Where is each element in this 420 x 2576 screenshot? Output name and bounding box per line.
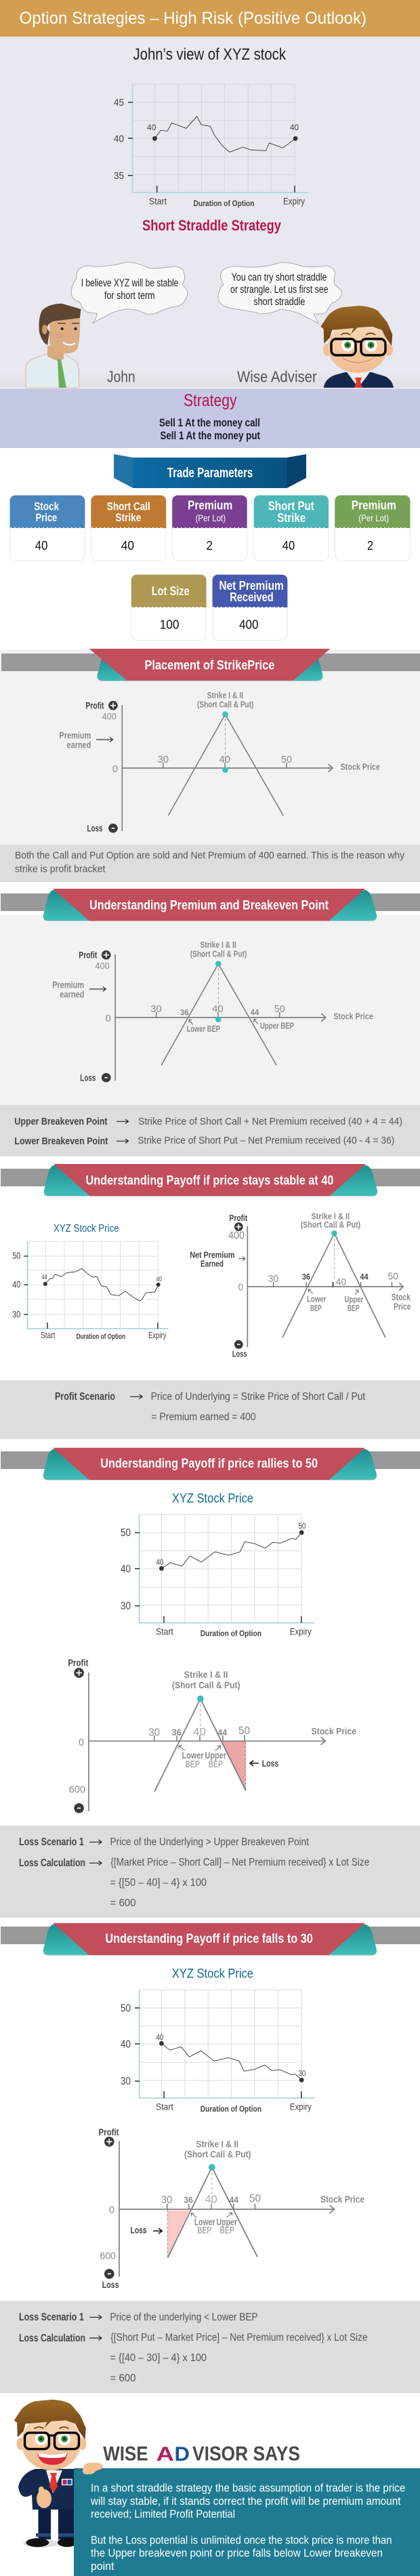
panel: Strategy: Sell 1 At the money put [160,429,260,442]
chart: XYZ stock price fall: Duration of Option [201,2104,261,2114]
chart: XYZ stock price fall: 30 [298,2070,306,2078]
chart: payoff when price rallies to 50: 44 [218,1727,228,1737]
text band: breakeven formulas: Lower Breakeven Point [14,1135,108,1147]
chart: strike placement payoff: Strike I & II [207,691,243,700]
chart: XYZ stock price stable: Expiry [148,1330,167,1340]
chart: payoff when price falls to 30: 36 [184,2194,193,2205]
card: Short Call Strike [91,496,166,561]
chart: payoff when price falls to 30: BEP [220,2226,234,2236]
chart: John's view line chart: Start [149,196,167,207]
card: Stock Price: Stock [34,500,59,512]
chart: John's view line chart: 40 [290,123,299,132]
ribbon heading: Understanding Payoff if price rallies to 50 [1,1448,420,1481]
header banner: Option Strategies – High Risk (Positive Outlook) [19,9,366,28]
chart: payoff when price rallies to 50: Profit [68,1657,89,1668]
chart: payoff when price rallies to 50: BEP [186,1759,200,1769]
chart: premium and breakeven payoff: Stock Price [333,1011,373,1022]
icon: mascot hand on panel [83,2463,103,2474]
chart: strike placement payoff [59,691,380,834]
chart: XYZ stock price rally: 30 [121,1601,131,1612]
chart: John's view line chart: 35 [114,170,124,182]
chart: XYZ stock price rally: 50 [298,1523,306,1531]
text band: loss scenario at 50: Price of the Underlying > Upper Breakeven Point [110,1836,310,1848]
chart: payoff when price falls to 30: BEP [197,2226,211,2236]
chart: payoff at stable price: 36 [302,1272,310,1281]
text band: breakeven formulas: Strike Price of Short Put – Net Premium received (40 - 4 = 36) [138,1135,394,1146]
text band: loss scenario at 30: {[Short Put – Market Price] – Net Premium received} x Lot Size [110,2332,368,2343]
character: Wise Adviser [320,306,394,388]
heading: Wise Advisor Says: VISOR SAYS [192,2442,300,2465]
chart: payoff at stable price: Strike I & II [312,1211,350,1221]
chart: payoff when price falls to 30: 30 [161,2194,173,2206]
card: Premium (Per Lot) call: 2 [206,539,213,552]
heading: Wise Advisor Says: D [175,2443,190,2466]
text band: breakeven formulas: Strike Price of Short Call + Net Premium received (40 + 4 = 44) [138,1116,402,1127]
panel: John's view and conversation [0,37,420,388]
text band: loss scenario at 50: = {[50 – 40] – 4} x 100 [110,1877,207,1889]
heading: Wise Advisor Says: WISE [103,2442,148,2465]
card: Stock Price [10,496,85,561]
card: Premium (Per Lot) put: 2 [367,539,373,552]
ribbon heading: Understanding Payoff if price falls to 30: Understanding Payoff if price falls to 30 [105,1932,313,1946]
chart: premium and breakeven payoff: (Short Call & Put) [190,949,247,959]
note: strike placement explanation: strike is profit bracket [15,864,106,875]
chart: payoff when price rallies to 50: 30 [148,1727,160,1739]
chart: payoff when price rallies to 50: 50 [238,1725,250,1737]
text band: breakeven formulas [0,1105,420,1156]
chart: payoff when price falls to 30: Loss [130,2226,147,2236]
chart: premium and breakeven payoff: 40 [212,1003,224,1015]
chart: XYZ stock price rally: 40 [156,1559,163,1567]
card: Net Premium Received: Net Premium [219,579,284,592]
chart: payoff when price falls to 30: 600 [100,2251,116,2262]
text band: profit scenario: = Premium earned = 400 [151,1411,256,1423]
character: Wise Advisor mascot [14,2400,87,2548]
chart: XYZ stock price stable: Start [41,1330,56,1340]
chart: strike placement payoff: 30 [157,754,169,765]
card: Stock Price: 40 [35,539,47,552]
chart: payoff at stable price: Earned [201,1259,224,1269]
card: Net Premium Received: Received [230,590,274,604]
ribbon heading: Trade Parameters [114,454,306,488]
chart: payoff at stable price: Net Premium [190,1250,234,1260]
text band: profit scenario [0,1380,420,1439]
chart: payoff when price falls to 30: Strike I & II [196,2138,238,2149]
card: Stock Price: Price [36,511,57,524]
chart: XYZ stock price stable: Duration of Option [77,1333,125,1341]
chart: John's view line chart: 45 [114,97,124,108]
speech bubble: John: for short term [104,290,155,302]
chart: premium and breakeven payoff: 44 [251,1007,259,1017]
chart: payoff when price falls to 30: Lower [194,2217,215,2228]
chart: payoff at stable price [190,1211,411,1359]
card: Premium (Per Lot) call: Premium [188,499,232,512]
card: Net Premium Received [213,575,287,640]
text band: loss scenario at 30: = {[40 – 30] – 4} x 100 [110,2352,207,2364]
chart: payoff when price falls to 30: Loss [102,2280,119,2290]
note: strike placement explanation [0,845,420,882]
card: Lot Size: 100 [160,618,179,632]
card: Lot Size: Lot Size [152,584,190,598]
text band: loss scenario at 30: Price of the underlying < Lower BEP [110,2312,257,2323]
card: Premium (Per Lot) put: Premium [352,499,396,512]
name label: John: John [107,367,135,385]
heading: John's view of XYZ stock: John’s view of XYZ stock [133,45,287,64]
chart: payoff when price rallies to 50: BEP [209,1759,223,1769]
ribbon heading: Understanding Premium and Breakeven Point: Understanding Premium and Breakeven Point [89,899,329,913]
panel: Premium and Breakeven background [0,914,420,1105]
chart: John's view line chart: 40 [114,133,124,145]
panel: Strategy: Strategy [184,391,237,410]
chart: payoff at stable price: 40 [336,1276,346,1288]
chart: XYZ stock price fall: 40 [156,2034,163,2042]
chart: premium and breakeven payoff: Lower BEP [187,1024,220,1034]
chart: payoff when price rallies to 50: 600 [69,1784,85,1796]
chart: XYZ stock price stable [12,1223,169,1341]
chart: payoff when price rallies to 50: 36 [171,1727,182,1737]
ribbon heading: Understanding Payoff if price rallies to 50: Understanding Payoff if price rallies to 50 [100,1457,318,1471]
chart: payoff at stable price: BEP [310,1303,322,1313]
character: John [26,304,81,388]
chart: payoff when price rallies to 50: Stock Price [312,1726,356,1737]
chart: strike placement payoff: Premium [59,729,91,740]
card: Short Put Strike: Strike [277,511,306,525]
chart: premium and breakeven payoff: 36 [180,1007,189,1017]
panel: Strategy: Sell 1 At the money call [159,416,260,429]
chart: payoff when price rallies to 50: Loss [262,1758,278,1769]
chart: strike placement payoff: earned [66,739,91,750]
chart: payoff when price falls to 30: (Short Call & Put) [184,2148,251,2159]
chart: strike placement payoff: Stock Price [341,762,380,772]
card: Short Put Strike: 40 [282,539,295,552]
chart: premium and breakeven payoff: Premium [52,979,84,990]
chart: premium and breakeven payoff [52,940,373,1083]
heading: Short Straddle Strategy: Short Straddle Strategy [142,217,282,234]
text band: loss scenario at 30 [0,2301,420,2393]
chart: payoff when price falls to 30: Profit [99,2127,119,2137]
speech bubble: Wise Adviser: or strangle. Let us first see [230,284,328,296]
chart: XYZ stock price stable: 40 [156,1276,162,1283]
chart: payoff at stable price: 44 [360,1272,369,1282]
chart: payoff when price falls to 30: 44 [229,2195,239,2205]
ribbon heading: Understanding Payoff if price stays stable at 40: Understanding Payoff if price stays stable at 40 [85,1174,333,1188]
chart: premium and breakeven payoff: earned [60,988,84,999]
chart: payoff at stable price: 0 [238,1281,243,1293]
chart: payoff when price rallies to 50: (Short Call & Put) [172,1680,240,1691]
card: Premium (Per Lot) call: (Per Lot) [196,512,226,523]
chart: strike placement payoff: Profit [85,700,104,710]
chart: strike placement payoff: 400 [102,710,117,721]
ribbon heading: Placement of StrikePrice: Placement of StrikePrice [145,658,274,672]
chart: John's view line chart: Duration of Option [194,199,255,208]
chart: XYZ stock price stable: 30 [12,1309,20,1319]
chart: payoff when price falls to 30: 0 [109,2204,114,2215]
chart: strike placement payoff: 50 [281,754,292,765]
header banner [0,0,420,37]
panel: Wise Advisor advice: point [91,2560,114,2573]
chart: premium and breakeven payoff: 50 [274,1003,285,1015]
ribbon heading: Understanding Payoff if price stays stable at 40 [1,1164,420,1196]
chart: payoff when price rallies to 50: Lower [182,1750,204,1760]
chart: payoff at stable price: 400 [228,1230,245,1242]
chart: XYZ stock price fall: 40 [121,2039,131,2051]
chart: premium and breakeven payoff: 0 [105,1013,111,1024]
heading: Wise Advisor Says: A [156,2443,174,2466]
chart: XYZ stock price stable: XYZ Stock Price [54,1223,119,1234]
chart: premium and breakeven payoff: Loss [80,1072,96,1083]
chart: payoff at stable price: (Short Call & Put) [301,1220,360,1230]
chart: premium and breakeven payoff: 400 [95,960,110,971]
speech bubble: John: I believe XYZ will be stable [81,278,178,289]
chart: XYZ stock price rally: Expiry [290,1626,312,1637]
card: Premium (Per Lot) put [335,496,410,561]
chart: payoff when price rallies to 50: 40 [193,1727,206,1738]
text band: loss scenario at 50: Loss Scenario 1 [19,1836,84,1848]
chart: payoff when price falls to 30: 40 [205,2194,217,2205]
card: Short Call Strike: 40 [121,539,134,552]
chart: payoff at stable price: Profit [229,1213,248,1223]
chart: payoff at stable price: Lower [307,1293,327,1304]
chart: XYZ stock price fall: 50 [121,2003,131,2014]
text band: loss scenario at 50: = 600 [110,1897,136,1909]
text band: loss scenario at 30: Loss Scenario 1 [19,2312,84,2323]
chart: XYZ stock price stable: 50 [12,1251,20,1261]
chart: payoff when price rallies to 50: Strike I & II [184,1669,228,1680]
chart: XYZ stock price rally: Start [156,1626,173,1637]
chart: XYZ stock price rally: 50 [121,1527,131,1539]
chart: strike placement payoff: 0 [112,763,118,775]
panel: Strategy [0,388,420,448]
heading: Wise Advisor Says [103,2442,300,2466]
speech bubble: John [71,262,188,323]
chart: John's view line chart: 40 [147,123,156,132]
chart: strike placement payoff: Loss [87,823,103,834]
text band: profit scenario: Profit Scenario [55,1391,115,1403]
chart: payoff at stable price: Stock [392,1292,411,1302]
heading: XYZ Stock Price rally: XYZ Stock Price [172,1492,253,1506]
text band: loss scenario at 30: = 600 [110,2373,136,2384]
chart: XYZ stock price fall [121,1990,315,2114]
card: Net Premium Received: 400 [239,618,259,632]
chart: payoff at stable price: 50 [387,1271,398,1283]
card: Short Put Strike: Short Put [268,500,314,513]
panel: Wise Advisor advice: the Upper breakeven point or price falls below Lower breakeven [91,2547,383,2560]
chart: payoff when price falls to 30 [99,2127,364,2290]
card: Short Call Strike: Strike [115,511,141,524]
text band: breakeven formulas: Upper Breakeven Point [14,1116,108,1127]
chart: XYZ stock price rally: 40 [121,1563,131,1575]
chart: XYZ stock price fall: 30 [121,2076,131,2087]
chart: XYZ stock price rally [121,1514,315,1638]
text band: loss scenario at 50 [0,1826,420,1918]
chart: payoff when price rallies to 50: Upper [205,1750,227,1760]
card: Short Put Strike [254,496,329,561]
chart: premium and breakeven payoff: 30 [150,1003,162,1015]
chart: John's view line chart: Expiry [283,196,305,207]
text band: loss scenario at 50: {[Market Price – Short Call] – Net Premium received} x Lot Size [110,1857,369,1868]
chart: payoff at stable price: 30 [268,1273,278,1285]
text band: loss scenario at 50: Loss Calculation [19,1857,85,1869]
chart: payoff when price falls to 30: Stock Price [320,2194,364,2205]
card: Premium (Per Lot) put: (Per Lot) [358,512,389,523]
chart: John's view line chart [114,84,308,208]
chart: payoff at stable price: Price [394,1302,411,1312]
text band: profit scenario: Price of Underlying = Strike Price of Short Call / Put [151,1391,366,1403]
chart: premium and breakeven payoff: Upper BEP [260,1020,294,1030]
chart: XYZ stock price fall: Expiry [290,2101,312,2112]
chart: strike placement payoff: (Short Call & Put) [197,700,253,709]
chart: XYZ stock price rally: Duration of Option [201,1629,261,1638]
chart: payoff when price rallies to 50 [68,1657,356,1813]
chart: XYZ stock price fall: Start [156,2101,173,2112]
ribbon heading: Placement of StrikePrice [1,649,420,681]
chart: strike placement payoff: 40 [219,754,230,765]
chart: payoff at stable price: BEP [348,1303,360,1313]
chart: payoff at stable price: Upper [344,1294,363,1304]
chart: premium and breakeven payoff: Strike I & II [200,940,236,950]
panel: Placement of StrikePrice background [0,649,420,845]
card: Premium (Per Lot) call [172,496,247,561]
chart: premium and breakeven payoff: Profit [79,949,98,960]
chart: payoff when price falls to 30: Upper [217,2217,238,2228]
chart: XYZ stock price stable: 44 [41,1274,47,1281]
chart: payoff when price falls to 30: 50 [249,2193,261,2205]
panel: Wise Advisor advice: received; Limited Profit Potential [91,2508,235,2520]
card: Short Call Strike: Short Call [107,500,150,512]
chart: payoff when price rallies to 50: 0 [79,1737,84,1748]
speech bubble: Wise Adviser: short straddle [253,296,305,308]
heading: XYZ Stock Price fall: XYZ Stock Price [172,1967,253,1981]
name label: Wise Adviser: Wise Adviser [237,367,317,385]
chart: payoff at stable price: Loss [232,1349,247,1359]
speech bubble: Wise Adviser: You can try short straddle [232,272,327,283]
speech bubble: Wise Adviser [218,262,341,323]
ribbon heading: Understanding Premium and Breakeven Point [1,889,420,921]
chart: XYZ stock price stable: 40 [12,1280,20,1290]
card: Lot Size [131,575,206,640]
panel: Wise Advisor advice [74,2468,420,2576]
ribbon heading: Trade Parameters: Trade Parameters [167,466,253,481]
ribbon heading: Understanding Payoff if price falls to 30 [1,1923,420,1956]
text band: loss scenario at 30: Loss Calculation [19,2333,85,2344]
